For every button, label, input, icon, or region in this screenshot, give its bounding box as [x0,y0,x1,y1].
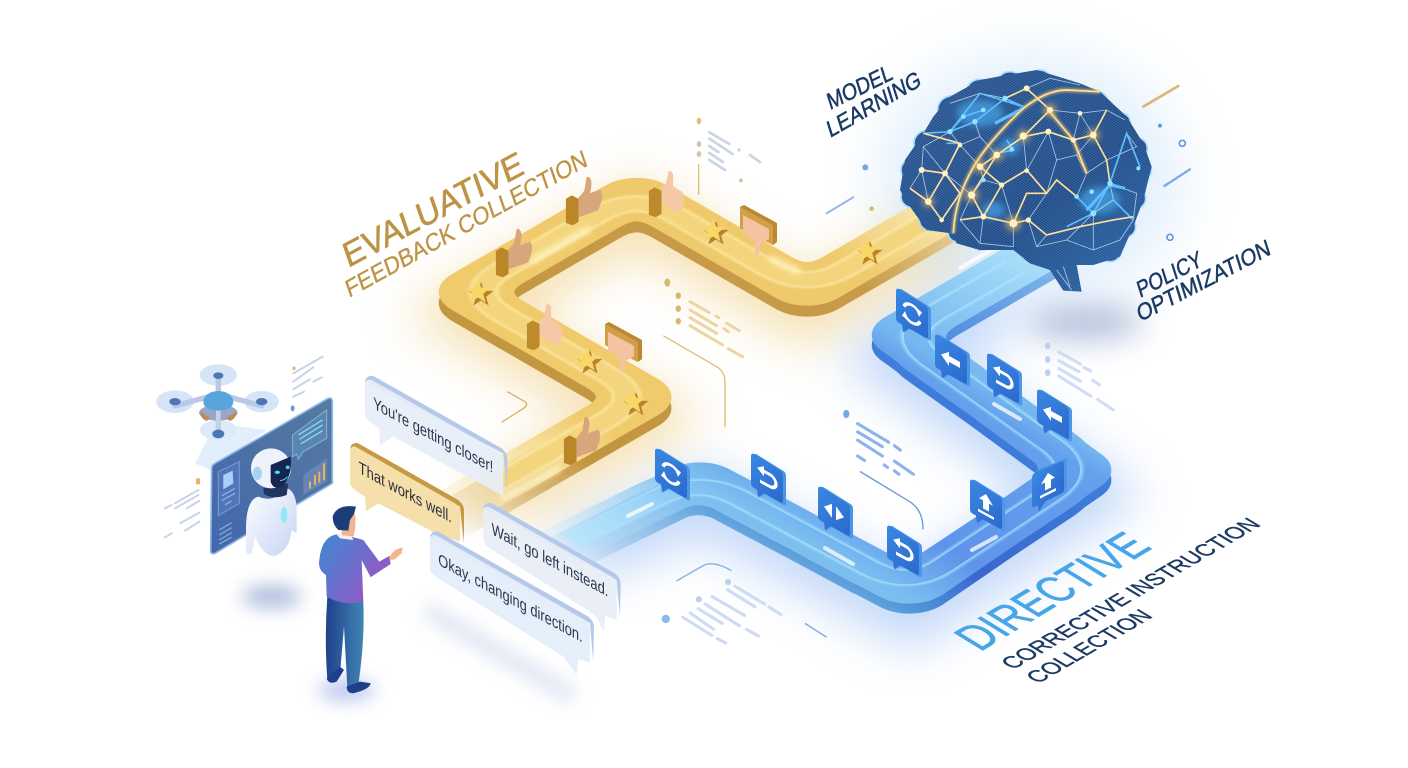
orange marker [293,367,295,370]
blue dot [843,410,849,418]
gold network [910,88,1133,235]
bubble: okay, changing direction [430,531,594,675]
drone dome [203,391,233,411]
accent line gold [1143,86,1178,107]
bubble text: That works well. [359,458,452,527]
bubble body [430,535,590,675]
icon: left arrow bubble [1037,387,1072,448]
brain silhouette [900,70,1152,292]
bubble shadow [427,610,573,697]
brain node glows [923,104,1099,231]
bubble: that works well [350,443,464,543]
robot head [251,448,291,488]
robot body [246,488,297,556]
gold connector [663,336,725,427]
chat card [293,410,327,459]
left data lines [165,490,199,537]
icon: up arrow bubble [970,477,1005,538]
label: optimization: OPTIMIZATION [1134,234,1273,327]
drone arms [175,379,262,430]
robot eyes and mouth [275,466,290,481]
icon: thumb up [564,417,600,465]
blue network [923,93,1140,227]
icon: star [701,218,728,244]
shoes [327,667,371,693]
gold glow lines [953,90,1100,233]
brain texture [900,70,1152,292]
title: directive: DIRECTIVE [944,526,1162,658]
trousers [326,597,364,687]
gold data lines [690,302,743,357]
road lane lines [312,115,953,485]
subtitle: collection: COLLECTION [1020,606,1158,687]
drone windows [201,412,236,421]
bubble top edge [350,443,464,543]
icon: sync bubble [655,446,690,507]
lower blue dot [662,615,670,623]
blue accent dash [827,197,853,213]
road side wall [258,118,966,527]
brain bumps [901,70,1151,264]
robot face [271,457,291,488]
chart card [303,458,327,495]
gold dot [869,206,874,211]
lower dash [805,623,827,637]
icon: thumb down [605,322,642,371]
orange marker [196,478,200,484]
bubble top edge [430,531,594,662]
hand [389,547,403,560]
person [319,506,403,693]
shirt [319,534,391,603]
bubble body [365,380,503,496]
gold dots [664,279,681,325]
bubble top edge [365,376,507,490]
card icon [223,471,233,489]
blue marker [291,405,295,411]
brain shadow [1027,306,1143,338]
blue dot [862,164,868,170]
panel lower lines [219,523,232,544]
brain nodes [919,85,1097,227]
road surface [258,108,966,516]
robot chest light [281,507,287,523]
chart bars [310,463,324,488]
drone motors [213,372,223,379]
blue connector [860,471,923,529]
brain [900,70,1152,292]
subtitle: feedback collection: FEEDBACK COLLECTION [342,145,591,304]
bubble body [483,507,617,632]
gold path glow shadow [312,130,966,507]
blue path glow shadow [565,300,1225,681]
icon: up arrow bubble [1032,456,1067,515]
bubble top edge [483,503,621,617]
right dots [1045,342,1050,376]
hair [333,506,356,531]
drone light cone [195,423,267,470]
label: policy: POLICY [1134,245,1205,303]
label: model: MODEL [824,59,896,115]
drone body [199,405,238,421]
icon: sync bubble [896,286,931,347]
bubble text: Wait, go left instead. [492,519,608,601]
small gold chevron [502,392,527,422]
robot neck [263,483,288,497]
chat card lines [298,420,323,444]
evaluative gold road [258,108,966,527]
bubble body [350,446,460,542]
icon: return bubble [751,451,786,512]
brain halo [880,55,1180,305]
decorative data lines center [502,118,874,427]
panel left card [218,462,239,516]
icon: return bubble [987,351,1022,412]
screen panel [211,398,332,554]
lower dots [696,579,731,602]
bubble: you're getting closer [365,376,507,496]
title: evaluative: EVALUATIVE [338,145,528,276]
accent line blue [1164,169,1190,186]
icon: return bubble [887,523,922,584]
icon: thumb up [649,171,684,217]
icon: thumb down [740,205,777,254]
road side wall [534,262,1268,685]
robot ear [253,467,262,480]
drone [156,364,279,440]
road highlights [500,228,800,500]
upper dots [697,118,743,182]
lower left connector [676,564,732,581]
brain side accents [1143,86,1190,240]
accent ring [1179,140,1185,146]
person shadow [318,680,375,700]
robot shadow [242,585,302,608]
left scene: drone, robot, person, speech bubbles [156,357,621,700]
decorative data lines blue [662,342,1113,643]
bubble: wait, go left instead [483,503,621,632]
blue data lines [858,424,913,474]
bubble text: Okay, changing direction. [438,550,583,647]
drone arms over body [211,408,225,428]
brain blue nodes [947,96,1140,216]
label: learning: LEARNING [824,65,924,143]
accent ring [1167,234,1173,240]
icon: thumb up [566,177,602,225]
lower data lines [683,586,781,643]
card lines [222,488,235,505]
brain mesh [910,78,1137,290]
neck and face [342,513,356,537]
directive blue road [534,245,1268,685]
collar [337,534,353,540]
icon: star [621,389,648,416]
icon: split arrows bubble [818,484,853,545]
right data lines [1059,352,1113,410]
upper data lines [709,132,760,170]
top right data lines [293,357,323,397]
icon: thumb up [496,229,532,277]
road dashes [628,245,1020,564]
road surface [534,252,1268,675]
gold vertical tick [697,164,701,195]
icon: thumb up [527,304,562,350]
road lane lines [557,266,1239,660]
icon: star [466,279,493,306]
subtitle: corrective instruction: CORRECTIVE INSTRUCTION [995,514,1266,673]
blue glow patches [957,100,1120,218]
panel face [211,398,332,554]
bubble text: You're getting closer! [373,393,493,477]
icon: star [855,238,882,264]
road lane fill [312,115,953,485]
accent dot [1158,124,1162,128]
rotor discs [200,364,237,386]
robot [246,448,297,556]
icon: star [575,347,602,374]
icon: left arrow bubble [935,332,970,393]
road lane fill [557,266,1239,660]
